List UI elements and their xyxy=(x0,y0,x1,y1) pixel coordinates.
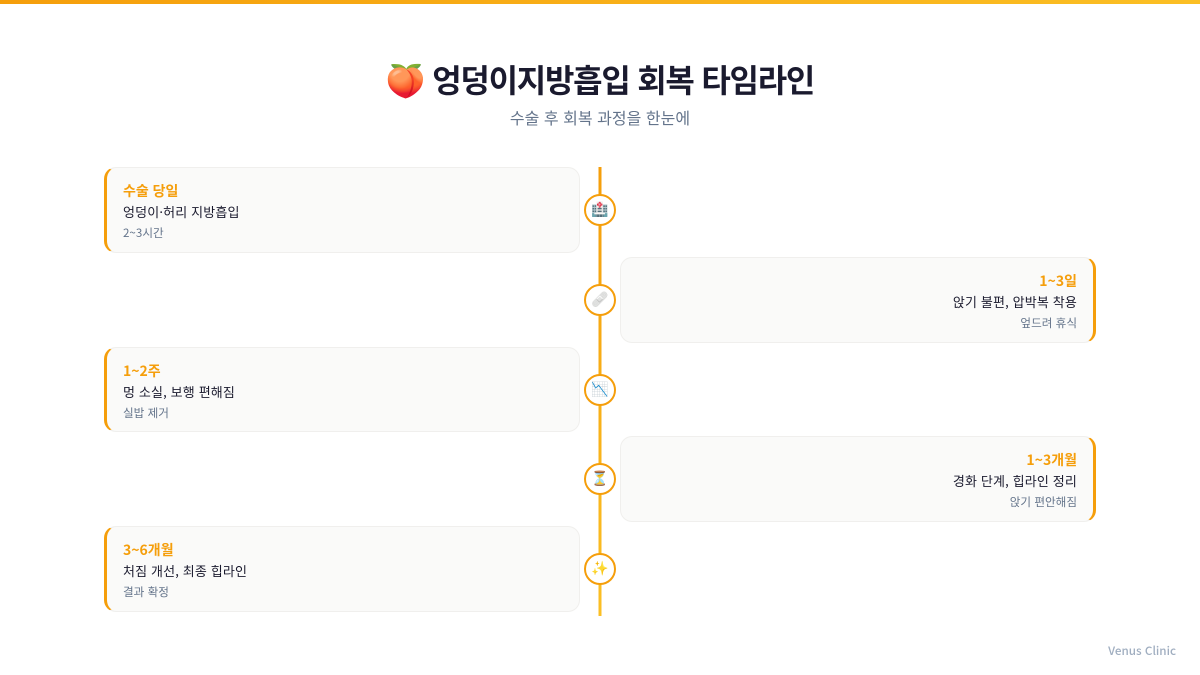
icon: hourglass xyxy=(584,463,616,495)
stage description: 앉기 불편, 압박복 착용 xyxy=(953,292,1077,311)
icon: falling chart: 📉 xyxy=(591,382,609,398)
stage heading: 1~2주 xyxy=(123,361,161,381)
panel: weeks 1-2 xyxy=(104,347,580,432)
stage description: 멍 소실, 보행 편해짐 xyxy=(123,382,235,401)
panel: surgery day xyxy=(104,167,580,253)
brand footer: Venus Clinic xyxy=(1108,642,1176,659)
icon: hospital xyxy=(584,194,616,226)
stage heading: 1~3개월 xyxy=(1026,450,1077,470)
icon: falling chart xyxy=(584,374,616,406)
panel: months 1-3 xyxy=(620,436,1096,522)
stage note: 2~3시간 xyxy=(123,225,164,241)
stage note: 엎드려 휴식 xyxy=(1020,315,1077,331)
stage description: 엉덩이·허리 지방흡입 xyxy=(123,202,240,221)
stage note: 앉기 편안해짐 xyxy=(1010,494,1077,510)
icon: bandage: 🩹 xyxy=(591,292,609,308)
stage note: 실밥 제거 xyxy=(123,405,169,421)
panel: days 1-3 xyxy=(620,257,1096,343)
icon: bandage xyxy=(584,284,616,316)
stage description: 처짐 개선, 최종 힙라인 xyxy=(123,561,247,580)
icon: sparkles xyxy=(584,553,616,585)
icon: hourglass: ⏳ xyxy=(591,471,609,487)
icon: hospital: 🏥 xyxy=(591,202,609,218)
stage description: 경화 단계, 힙라인 정리 xyxy=(953,471,1077,490)
icon: sparkles: ✨ xyxy=(591,561,609,577)
panel: months 3-6 xyxy=(104,526,580,612)
stage heading: 3~6개월 xyxy=(123,540,174,560)
timeline axis xyxy=(598,167,602,616)
stage heading: 수술 당일 xyxy=(123,181,178,201)
subtitle: 수술 후 회복 과정을 한눈에 xyxy=(510,105,690,129)
stage heading: 1~3일 xyxy=(1039,271,1077,291)
title: 🍑 엉덩이지방흡입 회복 타임라인 xyxy=(386,56,814,102)
stage note: 결과 확정 xyxy=(123,584,169,600)
header xyxy=(386,56,814,129)
top accent bar xyxy=(0,0,1200,4)
